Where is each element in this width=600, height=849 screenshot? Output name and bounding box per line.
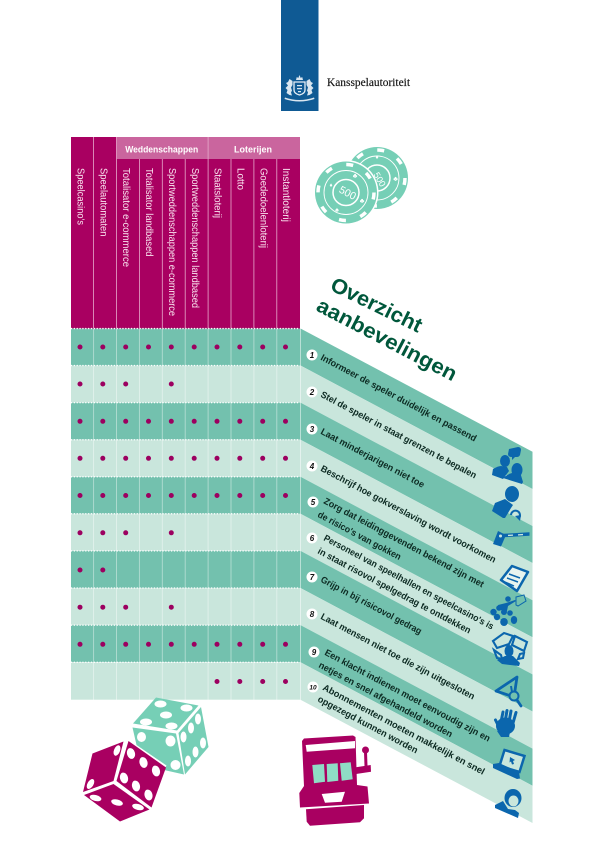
recommendation 7: 7 bbox=[310, 573, 315, 582]
icon: laptop bbox=[493, 750, 524, 779]
recommendation 8: 8 bbox=[310, 610, 315, 619]
recommendation 1: Informeer de speler duidelijk en passend bbox=[319, 352, 479, 444]
back chip bbox=[346, 147, 408, 209]
table header: magenta columns bbox=[71, 137, 300, 328]
icon: slot machine bbox=[299, 736, 371, 826]
icon: barrier bbox=[493, 531, 530, 546]
recommendation 8: Laat mensen niet toe die zijn uitgesloten bbox=[319, 611, 477, 702]
recommendation 1: 1 bbox=[310, 351, 315, 360]
icon: document bbox=[501, 566, 528, 591]
table rows bbox=[71, 328, 300, 700]
icon: raised hand bbox=[496, 710, 516, 737]
recommendation 9: 9 bbox=[312, 648, 317, 657]
front chip bbox=[315, 162, 377, 224]
recommendation 7: Grijp in bij risicovol gedrag bbox=[319, 574, 424, 636]
recommendation 2: 2 bbox=[309, 388, 315, 397]
heading: aanbevelingen bbox=[313, 294, 461, 386]
column labels: Instantloterij bbox=[280, 168, 291, 222]
recommendation 10: Abonnementen moeten makkelijk en snel bbox=[321, 682, 486, 777]
recommendation 4: Beschrijf hoe gokverslaving wordt voorkomen bbox=[319, 463, 498, 565]
front chip: ♦ bbox=[329, 183, 333, 189]
icon: person with headset bbox=[495, 789, 522, 818]
recommendation 9: Een klacht indienen moet eenvoudig zijn en bbox=[323, 647, 492, 744]
front chip: 500 bbox=[337, 184, 358, 203]
column labels: Goededoelenloterij bbox=[257, 168, 268, 248]
icon: presenter with audience bbox=[490, 595, 526, 626]
icon: magenta die bbox=[83, 741, 166, 822]
markers: dots per recommendation and game type bbox=[80, 347, 286, 682]
recommendation 6: in staat risovol spelgedrag te ontdekken bbox=[316, 546, 473, 636]
recommendation 6: 6 bbox=[310, 534, 315, 543]
header band: categories bbox=[116, 137, 300, 159]
column labels bbox=[74, 168, 291, 316]
recommendation 10: opgezegd kunnen worden bbox=[316, 694, 420, 755]
back chip: 500 bbox=[372, 170, 388, 189]
icon: casino chips bbox=[314, 147, 408, 225]
recommendation 5: de risico's van gokken bbox=[316, 509, 403, 562]
back chip: ♦ bbox=[375, 155, 379, 161]
front chip: ♣ bbox=[353, 173, 358, 180]
front chip: ♣ bbox=[360, 198, 365, 205]
column labels: Sportweddenschappen e-commerce bbox=[166, 168, 177, 316]
column labels: Speelautomaten bbox=[97, 168, 108, 236]
slanted recommendation bands bbox=[300, 328, 532, 823]
logo: ribbon with crest bbox=[281, 0, 318, 111]
header band: categories: Weddenschappen bbox=[125, 144, 198, 154]
column labels: Speelcasino's bbox=[74, 168, 86, 225]
back chip: ♣ bbox=[393, 176, 398, 183]
recommendation 4: 4 bbox=[309, 462, 315, 471]
column labels: Totalisator e-commerce bbox=[120, 168, 131, 267]
recommendation 9: netjes en snel afgehandeld worden bbox=[317, 660, 454, 739]
icon: people talking bbox=[492, 447, 523, 484]
front chip: ♠ bbox=[335, 207, 339, 214]
header band: categories: Loterijen bbox=[234, 144, 272, 154]
recommendation 10: 10 bbox=[309, 684, 317, 692]
heading: Overzicht bbox=[327, 273, 426, 337]
column labels: Lotto bbox=[234, 168, 246, 190]
column labels: Totalisator landbased bbox=[143, 168, 154, 256]
recommendation 2: Stel de speler in staat grenzen te bepalen bbox=[319, 389, 479, 481]
recommendation 6: Personeel van speelhallen en speelcasino's is bbox=[322, 533, 495, 631]
recommendation 3: 3 bbox=[310, 425, 315, 434]
icon: warning with magnifier bbox=[496, 677, 521, 706]
icon: crest bbox=[284, 75, 314, 102]
logo wordmark: Kansspelautoriteit bbox=[327, 77, 411, 89]
column labels: Sportweddenschappen landbased bbox=[189, 168, 200, 308]
recommendation 5: 5 bbox=[311, 498, 316, 507]
icon: person with return arrow bbox=[492, 486, 521, 521]
icon: teal die bbox=[132, 698, 208, 774]
recommendation 3: Laat minderjarigen niet toe bbox=[319, 426, 426, 490]
recommendation 5: Zorg dat leidinggevenden bekend zijn met bbox=[322, 496, 486, 589]
column labels: Staatsloterij bbox=[212, 168, 223, 218]
icon: screens with watcher bbox=[493, 633, 527, 666]
